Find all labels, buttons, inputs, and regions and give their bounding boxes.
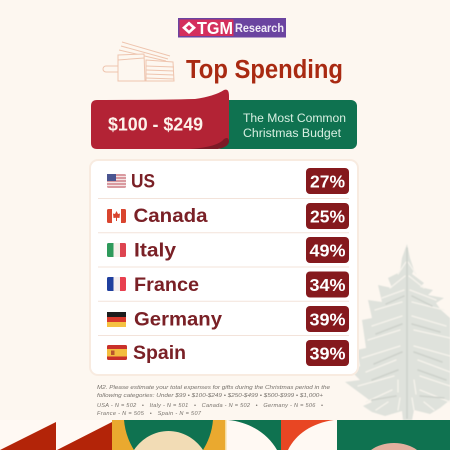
logo: TGM Research (178, 18, 286, 38)
row: France: France (134, 275, 199, 296)
icon: Germany flag (107, 312, 126, 327)
text block: survey footnote: France - N = 505 • Spain - N = 507 (97, 411, 202, 417)
tile: red triangles (0, 420, 112, 450)
text block: survey footnote: following categories: Under $99 • $100-$249 • $250-$499 • $500-$999 • $1,000+ (97, 393, 324, 399)
row: US (107, 168, 349, 194)
tile: green and red curved shapes (225, 420, 337, 450)
row: US: US (131, 172, 155, 192)
row: Italy (107, 237, 349, 263)
decorative holiday tile strip (0, 420, 450, 450)
row: Spain: Spain (133, 343, 186, 364)
row: Canada (107, 203, 349, 229)
icon: wallet (103, 42, 174, 81)
icon: Italy flag (107, 243, 126, 257)
title: Top Spending (186, 56, 343, 84)
logo: TGM Research: Research (235, 21, 284, 35)
tile: green with pink circle (337, 420, 450, 450)
row: France: 34% (310, 275, 346, 295)
text block: survey footnote: M2. Please estimate your total expenses for gifts during the Christmas period in the (97, 385, 330, 391)
panel: red ribbon (91, 90, 229, 149)
row: Canada: 25% (310, 206, 345, 226)
row: Germany: 39% (310, 310, 346, 330)
icon: Canada flag (107, 209, 126, 223)
row: US: 27% (310, 172, 345, 192)
icon: France flag (107, 277, 126, 291)
tile: green and cream arch (112, 420, 225, 450)
panel: green budget label: Christmas Budget (243, 128, 342, 140)
logo: TGM Research: TGM (197, 18, 233, 38)
row: Germany (107, 306, 349, 332)
row: Italy: Italy (134, 240, 176, 262)
icon: US flag (107, 174, 126, 188)
row: Spain: 39% (310, 344, 346, 364)
row: Germany: Germany (134, 310, 222, 330)
text block: survey footnote: USA - N = 502 • Italy - N = 501 • Canada - N = 502 • Germany - N = 506 • (97, 403, 323, 409)
row: Canada: Canada (134, 206, 208, 227)
icon: pine tree illustration (345, 244, 450, 420)
text block: survey footnote (97, 385, 330, 417)
banner: most common budget (91, 90, 357, 149)
icon: logo diamond (182, 22, 196, 34)
panel: green budget label: The Most Common (243, 113, 346, 125)
panel: red ribbon: $100 - $249 (108, 114, 203, 134)
row: France (107, 272, 349, 298)
panel: country list card (89, 159, 359, 376)
icon: Spain flag (107, 345, 127, 360)
panel: green budget label (215, 100, 357, 149)
row: Spain (107, 340, 349, 366)
row: Italy: 49% (310, 240, 346, 260)
